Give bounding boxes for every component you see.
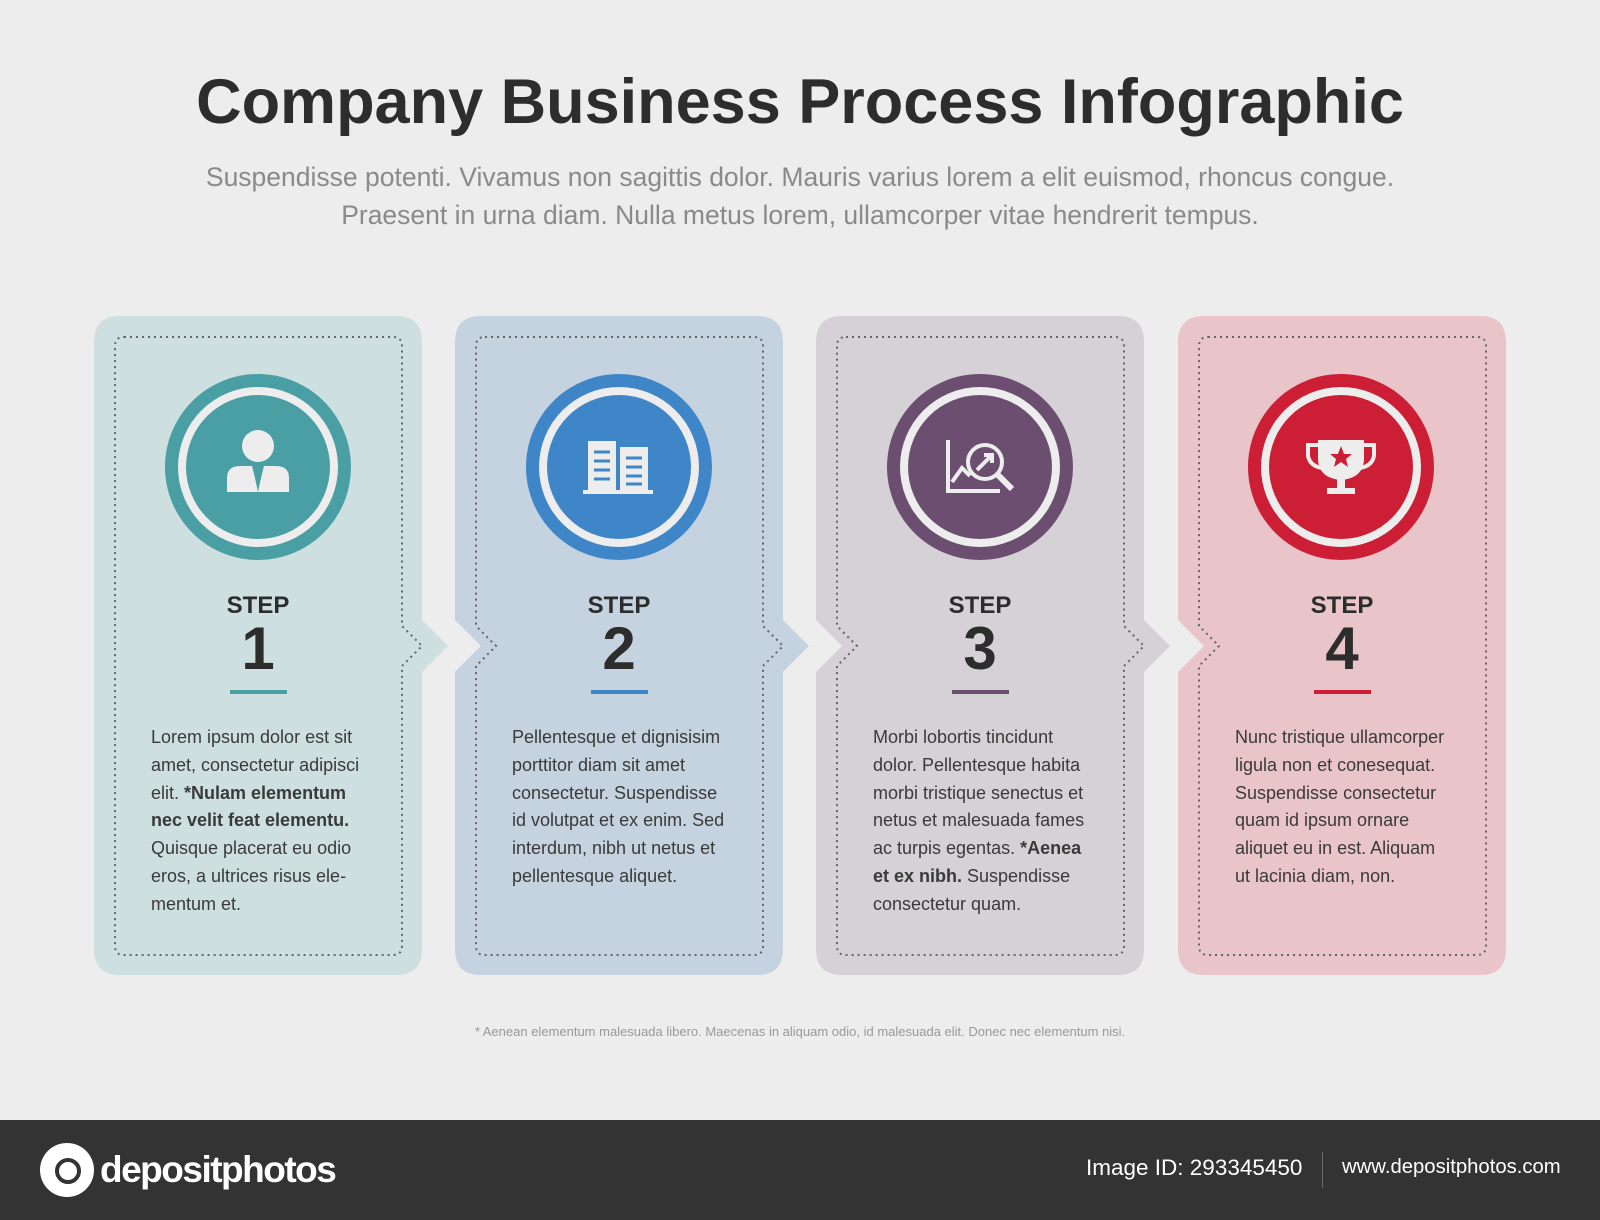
footnote: * Aenean elementum malesuada libero. Maecenas in aliquam odio, id malesuada elit. Donec nec elementum nisi. (475, 1024, 1125, 1039)
subtitle: Suspendisse potenti. Vivamus non sagittis dolor. Mauris varius lorem a elit euismod, rhoncus congue. (206, 162, 1394, 192)
text step 1: Quisque placerat eu odio (151, 838, 351, 858)
text step 4: ut lacinia diam, non. (1235, 866, 1395, 886)
text step 1: nec velit feat elementu. (151, 810, 349, 830)
text step 2 (512, 727, 724, 886)
step 1 label: 1 (241, 615, 275, 682)
icon circle 3: chart magnifier (887, 374, 1073, 560)
step 2 label: STEP (588, 592, 650, 619)
url: www.depositphotos.com (1342, 1156, 1561, 1178)
step 2 label (588, 592, 650, 694)
step 4 label (1311, 592, 1373, 694)
text step 3: consectetur quam. (873, 894, 1021, 914)
text step 2: interdum, nibh ut netus et (512, 838, 715, 858)
logo (40, 1143, 336, 1197)
panel shape 1 (94, 316, 448, 975)
text step 2: consectetur. Suspendisse (512, 783, 717, 803)
panel shape 4 (1178, 316, 1506, 975)
step 1 label (227, 592, 289, 694)
text step 3: ac turpis egentas. *Aenea (873, 838, 1081, 858)
footer bar (0, 1120, 1600, 1220)
text step 3 (873, 727, 1084, 914)
text step 3: dolor. Pellentesque habita (873, 755, 1080, 775)
text step 1: mentum et. (151, 894, 241, 914)
logo: depositphotos (100, 1149, 335, 1190)
step 4 label: 4 (1325, 615, 1359, 682)
icon circle 2: buildings (526, 374, 712, 560)
text step 3: netus et malesuada fames (873, 810, 1084, 830)
icon circle 4: trophy (1248, 374, 1434, 560)
icon circle 1: person (165, 374, 351, 560)
text step 4: quam id ipsum ornare (1235, 810, 1409, 830)
text step 4: aliquet eu in est. Aliquam (1235, 838, 1435, 858)
subtitle (206, 162, 1394, 230)
image id: Image ID: 293345450 (1086, 1155, 1302, 1180)
text step 4 (1235, 727, 1444, 886)
text step 1: elit. *Nulam elementum (151, 783, 346, 803)
text step 2: pellentesque aliquet. (512, 866, 677, 886)
text step 4: Nunc tristique ullamcorper (1235, 727, 1444, 747)
title: Company Business Process Infographic (196, 67, 1404, 137)
subtitle: Praesent in urna diam. Nulla metus lorem, ullamcorper vitae hendrerit tempus. (341, 200, 1259, 230)
text step 3: et ex nibh. Suspendisse (873, 866, 1070, 886)
step 2 label: 2 (602, 615, 636, 682)
text step 1 (151, 727, 359, 914)
text step 2: id volutpat et ex enim. Sed (512, 810, 724, 830)
text step 4: Suspendisse consectetur (1235, 783, 1436, 803)
text step 1: eros, a ultrices risus ele- (151, 866, 346, 886)
step 3 label: 3 (963, 615, 997, 682)
text step 1: Lorem ipsum dolor est sit (151, 727, 352, 747)
text step 3: morbi tristique senectus et (873, 783, 1083, 803)
text step 3: Morbi lobortis tincidunt (873, 727, 1053, 747)
step 3 label (949, 592, 1011, 694)
text step 2: Pellentesque et dignisisim (512, 727, 720, 747)
text step 4: ligula non et conesequat. (1235, 755, 1435, 775)
text step 2: porttitor diam sit amet (512, 755, 685, 775)
text step 1: amet, consectetur adipisci (151, 755, 359, 775)
step 1 label: STEP (227, 592, 289, 619)
panel shape 2 (455, 316, 809, 975)
step 3 label: STEP (949, 592, 1011, 619)
panel shape 3 (816, 316, 1170, 975)
step 4 label: STEP (1311, 592, 1373, 619)
